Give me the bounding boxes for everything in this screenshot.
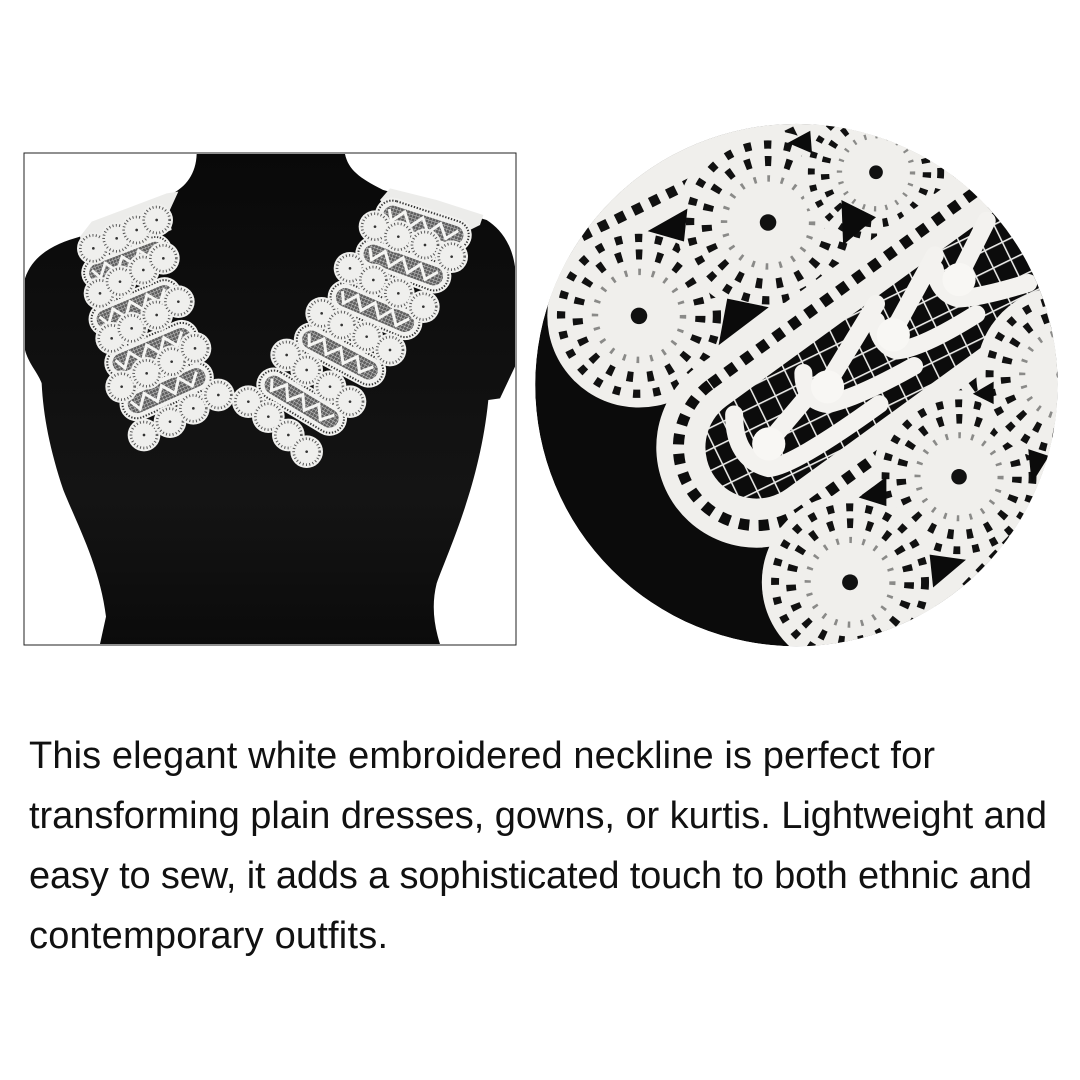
left collar piece: [76, 192, 235, 451]
description text: easy to sew, it adds a sophisticated touch to both ethnic and: [29, 855, 1032, 897]
lower rosette cluster: [762, 286, 1080, 671]
panel: mannequin photo: [24, 153, 516, 645]
right collar piece: [232, 188, 483, 468]
description text: This elegant white embroidered neckline is perfect for: [29, 735, 935, 777]
mannequin torso: [25, 154, 515, 644]
description text: [29, 735, 1047, 957]
photo frame: [24, 153, 516, 645]
scalloped band with net and chevrons: [656, 178, 1056, 548]
black backdrop: [535, 124, 1058, 646]
black triangle gaps: [648, 131, 1049, 587]
description text: transforming plain dresses, gowns, or kurtis. Lightweight and: [29, 795, 1047, 837]
upper rosette strip: [547, 124, 982, 408]
description text: contemporary outfits.: [29, 915, 388, 957]
panel: circular lace close-up: [535, 124, 1058, 646]
mannequin with collar: [25, 154, 515, 644]
